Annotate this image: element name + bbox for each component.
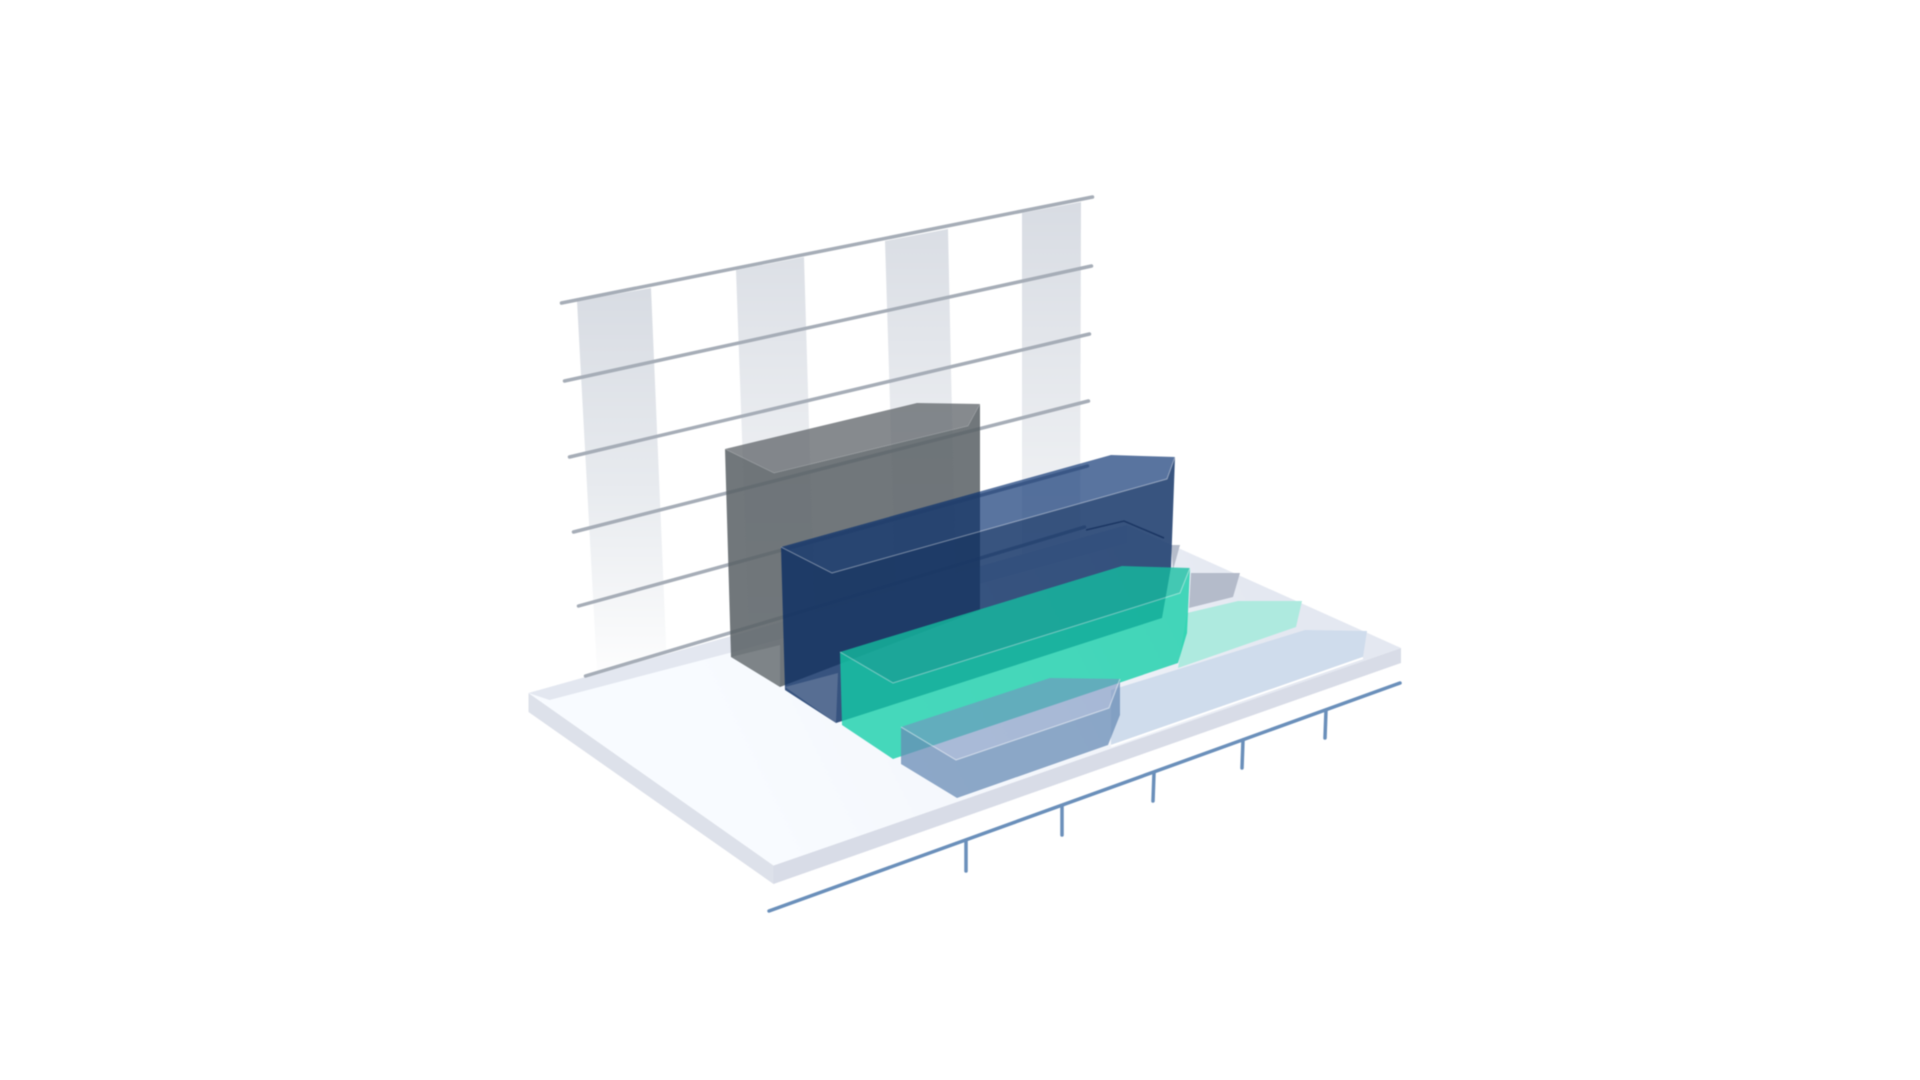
platform [528, 525, 1401, 884]
wall stripes [577, 202, 1081, 690]
floor reflections [1111, 545, 1367, 746]
bar: grey [725, 403, 980, 687]
axis with ticks [769, 683, 1400, 911]
bar: light blue [901, 678, 1120, 798]
grid lines [562, 197, 1092, 676]
bar: teal [840, 566, 1190, 759]
bar: navy [781, 455, 1175, 723]
